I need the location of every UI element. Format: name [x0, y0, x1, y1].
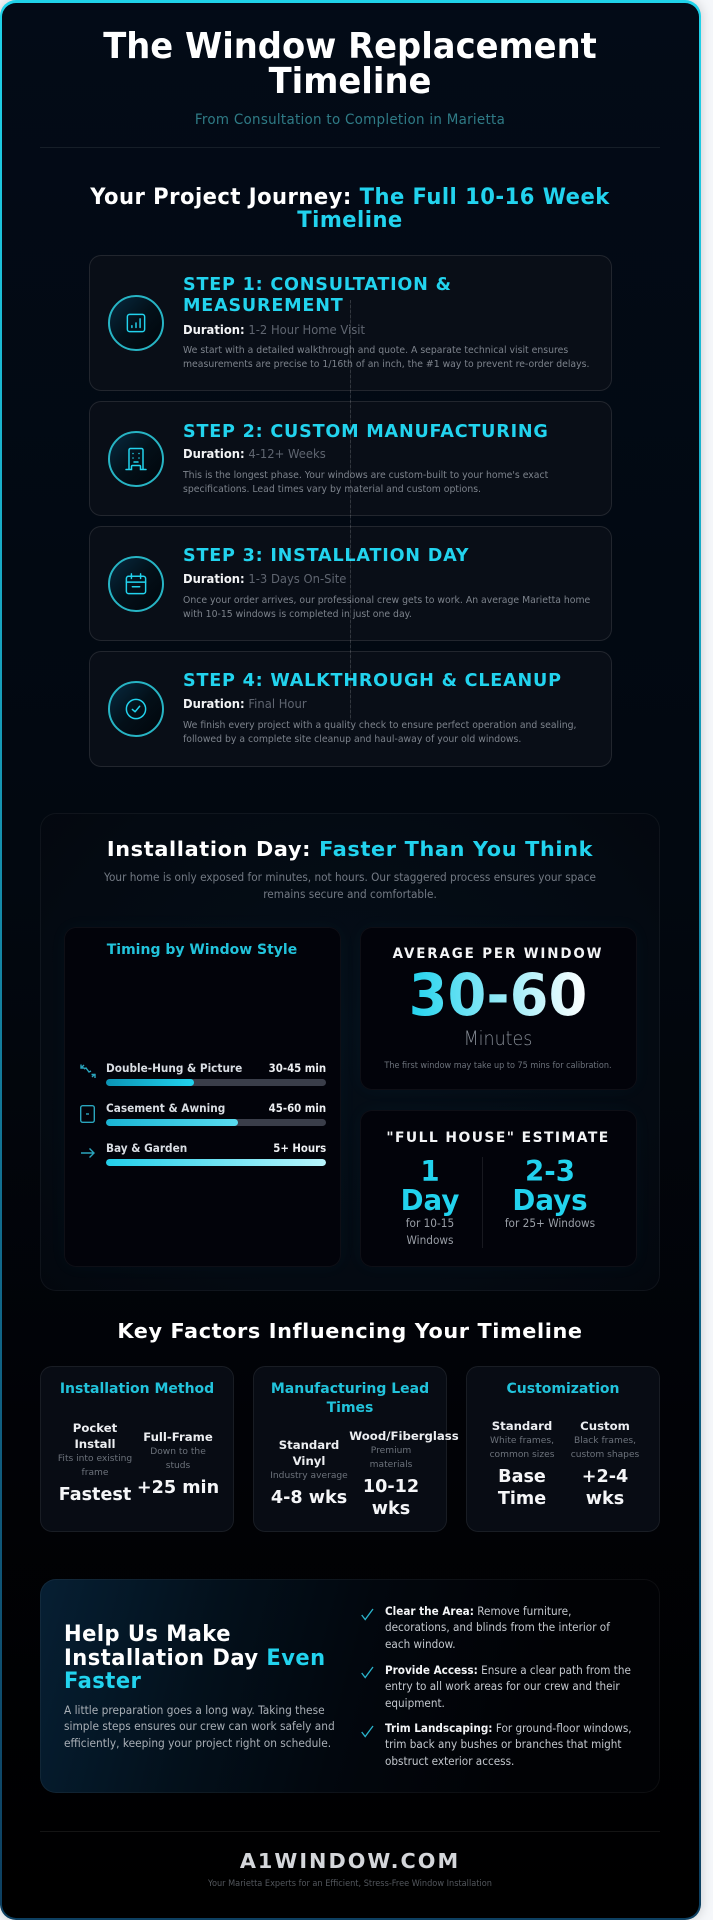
- card title: Times: [327, 1400, 373, 1416]
- standard vinyl: Vinyl: [293, 1454, 325, 1468]
- help heading: Help Us Make: [64, 1621, 231, 1647]
- progress bar: [106, 1159, 326, 1166]
- step 2 description: This is the longest phase. Your windows are custom-built to your home's exact: [183, 470, 548, 481]
- step 2 duration: Duration: 4-12+ Weeks: [183, 446, 326, 461]
- heading: project journey: Timeline: [297, 207, 403, 233]
- value: 5+ Hours: [273, 1142, 326, 1155]
- divider line: [482, 1157, 483, 1248]
- icon: check: [361, 1608, 374, 1621]
- step 4 description: [183, 720, 576, 745]
- standard: common sizes: [490, 1450, 554, 1460]
- custom: custom shapes: [571, 1450, 639, 1460]
- step 1 heading: STEP 1: CONSULTATION &: [183, 275, 452, 295]
- full-frame: [137, 1430, 219, 1498]
- value: [401, 1154, 459, 1216]
- step 3 card: [89, 526, 612, 641]
- estimate: one day: [401, 1154, 459, 1247]
- icon: chart in circle: [108, 295, 164, 351]
- panel: installation day: [40, 813, 660, 1291]
- card title: [271, 1381, 429, 1416]
- checklist item: provide access: [361, 1664, 631, 1710]
- step 4 description: followed by a complete site cleanup and haul-away of your old windows.: [183, 734, 521, 745]
- panel: customization: [466, 1366, 660, 1532]
- standard: White frames,: [490, 1436, 554, 1446]
- custom: +2-4: [582, 1467, 628, 1487]
- step 1 duration: Duration: 1-2 Hour Home Visit: [183, 322, 365, 337]
- help heading: Installation Day Even: [64, 1644, 326, 1670]
- card title: Manufacturing Lead: [271, 1381, 429, 1397]
- help paragraph: efficiently, keeping your project right on schedule.: [64, 1737, 331, 1750]
- brand name: A1WINDOW.COM: [240, 1849, 460, 1873]
- pocket install: Fits into existing: [58, 1454, 132, 1464]
- standard: Time: [498, 1488, 546, 1508]
- panel: full house estimate: [360, 1110, 637, 1267]
- wood and fiberglass: Wood/Fiberglass: [349, 1429, 459, 1443]
- step 3 heading: STEP 3: INSTALLATION DAY: [183, 546, 469, 566]
- full-frame: Full-Frame: [143, 1430, 213, 1444]
- icon: check: [361, 1725, 374, 1738]
- step 3 description: with 10-15 windows is completed in just one day.: [183, 609, 412, 620]
- item text: [385, 1664, 631, 1710]
- step 4 description: We finish every project with a quality check to ensure perfect operation and sealing,: [183, 720, 576, 731]
- custom: wks: [586, 1488, 624, 1508]
- subtitle: From Consultation to Completion in Marietta: [195, 112, 505, 128]
- step 4 heading: STEP 4: WALKTHROUGH & CLEANUP: [183, 671, 562, 691]
- standard: Standard: [492, 1419, 552, 1433]
- pocket install: Pocket: [73, 1421, 117, 1435]
- value: Days: [512, 1182, 588, 1216]
- step 1 heading: [183, 275, 452, 316]
- step 4 card: [89, 651, 612, 767]
- item text: entry to all work areas for our crew and their: [385, 1680, 620, 1693]
- label: Double-Hung & Picture: [106, 1062, 242, 1075]
- step 2 description: [183, 470, 548, 495]
- checklist item: trim landscaping: [385, 1721, 655, 1771]
- standard: [490, 1419, 554, 1508]
- installation day heading: Installation Day: Faster Than You Think: [107, 837, 593, 861]
- title: Timeline: [269, 61, 431, 102]
- panel: installation method: [40, 1366, 234, 1532]
- minutes label: Minutes: [464, 1027, 532, 1050]
- step 3 description: [183, 595, 590, 620]
- step 1 description: [183, 345, 589, 370]
- heading: project journey: Your Project Journey: The Full 10-16 Week: [90, 184, 610, 210]
- pocket install: Fastest: [59, 1485, 131, 1505]
- item text: trim back any bushes or branches that might: [385, 1738, 622, 1751]
- full-frame: studs: [166, 1461, 190, 1471]
- help heading: Faster: [64, 1668, 141, 1694]
- caption: [406, 1217, 454, 1247]
- installation day intro: [104, 871, 596, 901]
- step 2 description: specifications. Lead times vary by material and custom options.: [183, 484, 481, 495]
- calibration note: The first window may take up to 75 mins for calibration.: [384, 1061, 612, 1071]
- item text: [385, 1605, 610, 1651]
- footer tagline: Your Marietta Experts for an Efficient, Stress-Free Window Installation: [208, 1879, 492, 1889]
- item text: Provide Access: Ensure a clear path from the: [385, 1664, 631, 1677]
- item text: each window.: [385, 1638, 456, 1651]
- step 1 description: We start with a detailed walkthrough and quote. A separate technical visit ensures: [183, 345, 568, 356]
- card title: Customization: [507, 1381, 619, 1397]
- help paragraph: A little preparation goes a long way. Taking these: [64, 1704, 325, 1717]
- checklist item: clear the area: [361, 1605, 610, 1651]
- value: Day: [401, 1182, 459, 1216]
- pocket install: [58, 1421, 132, 1505]
- big number: 30-60: [409, 962, 587, 1029]
- step 2 heading: STEP 2: CUSTOM MANUFACTURING: [183, 422, 549, 442]
- icon: arrow right: [81, 1148, 95, 1158]
- caption: for 25+ Windows: [505, 1217, 595, 1230]
- pocket install: Install: [74, 1437, 116, 1451]
- custom: [571, 1419, 639, 1508]
- label: Casement & Awning: [106, 1102, 225, 1115]
- standard vinyl: [270, 1438, 348, 1508]
- step 1 heading: MEASUREMENT: [183, 296, 344, 316]
- standard vinyl: Industry average: [270, 1471, 348, 1481]
- timing heading: Timing by Window Style: [107, 942, 297, 958]
- panel: average per window: [360, 927, 637, 1090]
- progress bar: [106, 1119, 326, 1126]
- title: The Window Replacement: [103, 26, 597, 67]
- step 1 card: [89, 255, 612, 391]
- full-frame: Down to the: [150, 1447, 206, 1457]
- step 1 description: measurements are precise to 1/16th of an inch, the #1 way to prevent re-order delays.: [183, 359, 589, 370]
- step 3 description: Once your order arrives, our professional crew gets to work. An average Marietta home: [183, 595, 590, 606]
- panel: timing by window style: [64, 927, 341, 1267]
- value: 1: [420, 1154, 440, 1188]
- standard vinyl: 4-8 wks: [271, 1488, 347, 1508]
- pocket install: frame: [82, 1468, 108, 1478]
- item text: [385, 1721, 632, 1770]
- heading: project journey: [90, 184, 610, 233]
- item text: decorations, and blinds from the interior of: [385, 1621, 610, 1634]
- standard: Base: [498, 1467, 546, 1487]
- row: double-hung and picture: [80, 1062, 326, 1086]
- panel: manufacturing lead times: [253, 1366, 447, 1532]
- icon: expand arrows: [80, 1064, 96, 1078]
- value: 2-3: [525, 1154, 575, 1188]
- icon: check in circle: [108, 681, 164, 737]
- step 2 card: [89, 401, 612, 516]
- help paragraph: [64, 1704, 335, 1750]
- step 4 duration: Duration: Final Hour: [183, 696, 307, 711]
- wood and fiberglass: Premium: [371, 1446, 411, 1456]
- standard vinyl: Standard: [279, 1438, 339, 1452]
- help paragraph: simple steps ensures our crew can work safely and: [64, 1720, 335, 1733]
- item text: Trim Landscaping: For ground-floor windows,: [385, 1722, 632, 1735]
- custom: Black frames,: [574, 1436, 636, 1446]
- wood and fiberglass: 10-12: [363, 1477, 419, 1497]
- value: 45-60 min: [269, 1102, 326, 1115]
- item text: equipment.: [385, 1697, 445, 1710]
- value: 30-45 min: [269, 1062, 326, 1075]
- installation day intro: Your home is only exposed for minutes, not hours. Our staggered process ensures your space: [104, 871, 596, 884]
- title: [103, 26, 597, 102]
- icon: building in circle: [108, 431, 164, 487]
- card title: Installation Method: [60, 1381, 214, 1397]
- row: casement and awning: [80, 1102, 326, 1126]
- estimate heading: "FULL HOUSE" ESTIMATE: [386, 1130, 610, 1146]
- installation day intro: remains secure and comfortable.: [263, 888, 437, 901]
- average heading: AVERAGE PER WINDOW: [393, 946, 603, 962]
- icon: calendar in circle: [108, 556, 164, 612]
- wood and fiberglass: materials: [370, 1460, 412, 1470]
- caption: Windows: [407, 1234, 453, 1247]
- wood and fiberglass: wks: [372, 1498, 410, 1518]
- full-frame: +25 min: [137, 1478, 219, 1498]
- custom: Custom: [580, 1419, 630, 1433]
- wood and fiberglass: [349, 1429, 459, 1518]
- item text: Clear the Area: Remove furniture,: [385, 1605, 571, 1618]
- step 3 duration: Duration: 1-3 Days On-Site: [183, 571, 346, 586]
- caption: for 10-15: [406, 1217, 454, 1230]
- row: bay and garden: [81, 1142, 326, 1166]
- help heading: [64, 1621, 326, 1694]
- value: [512, 1154, 588, 1216]
- estimate: two to three days: [505, 1154, 595, 1230]
- item text: obstruct exterior access.: [385, 1755, 514, 1768]
- label: Bay & Garden: [106, 1142, 187, 1155]
- icon: panel with minus: [80, 1105, 95, 1123]
- progress bar: [106, 1079, 326, 1086]
- icon: check: [361, 1666, 374, 1679]
- panel: help us: [40, 1579, 660, 1793]
- heading: key factors: Key Factors Influencing Your Timeline: [117, 1319, 583, 1343]
